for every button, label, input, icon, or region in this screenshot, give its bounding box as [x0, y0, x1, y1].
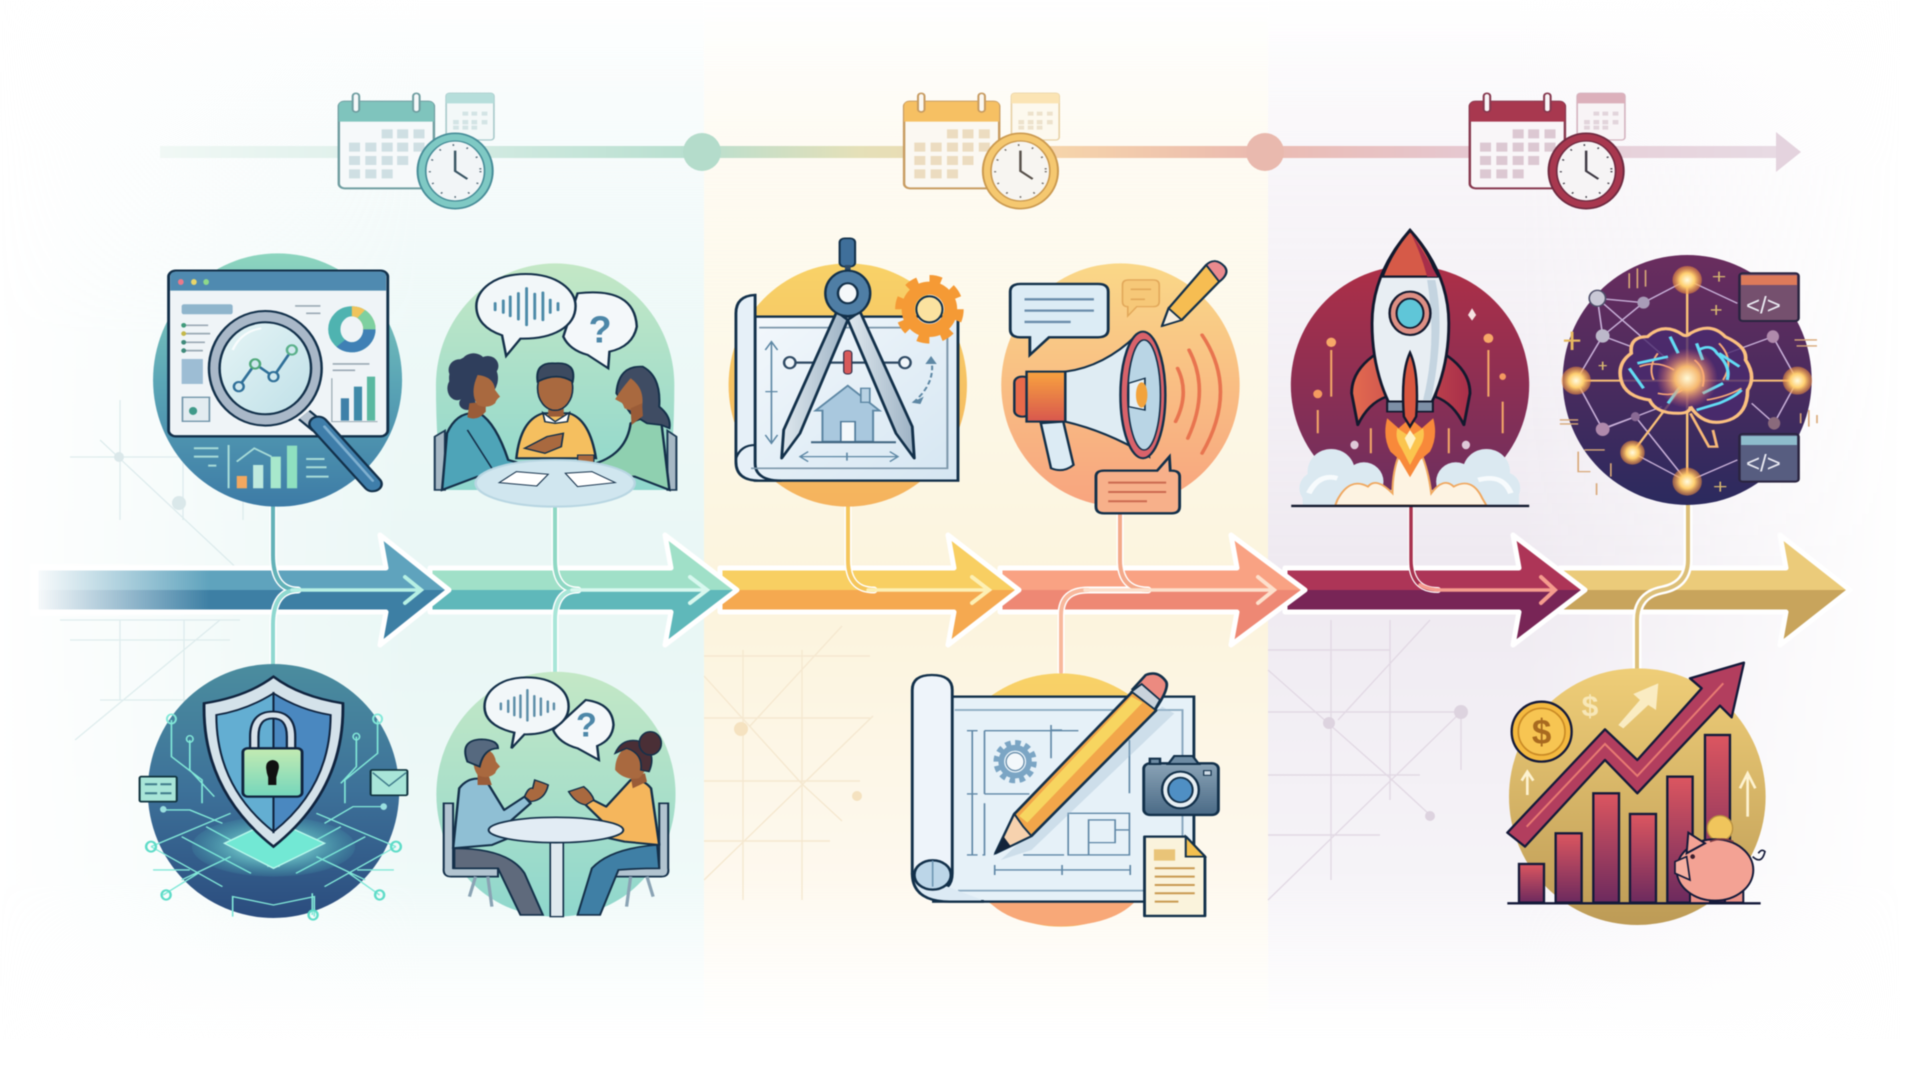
icon: AI brain network: [1560, 255, 1817, 505]
connector: arrow 6: [1637, 505, 1688, 668]
icon: growth chart with coin and piggy bank: $: [1582, 691, 1599, 724]
calendar and clock: amber: [904, 93, 1059, 209]
connectors: arrow 2: [555, 505, 707, 675]
arrow 3: amber: [720, 535, 1019, 645]
arrow 6: gold: [1560, 535, 1850, 645]
icon: growth chart with coin and piggy bank: [1507, 663, 1766, 925]
arrow 4: coral: [1000, 535, 1305, 645]
background network pattern: amber phase: [704, 626, 873, 900]
background panel: amber phase: [704, 0, 1268, 1040]
arrow 5: crimson: [1285, 535, 1585, 645]
connector: arrow 5: [1411, 505, 1555, 603]
timeline line with milestones and arrowhead: [160, 132, 1801, 172]
icon: AI brain network: </>: [1746, 292, 1781, 319]
background network pattern: plum phase: [1268, 620, 1468, 900]
background panel: plum phase: [1268, 0, 1927, 1040]
icon: blueprint and compass: [729, 238, 967, 507]
background network pattern: teal phase: [60, 400, 260, 760]
icon: design blueprint with pencil, camera and document: [912, 673, 1218, 927]
icon: AI brain network: </>: [1746, 451, 1781, 478]
calendar and clock: teal: [339, 93, 494, 209]
calendar and clock: crimson: [1470, 93, 1625, 209]
connector: arrow 3: [848, 505, 989, 603]
icon: team of three in discussion: ?: [589, 309, 612, 351]
icon: two people in conversation: [436, 672, 676, 917]
arrow 1: blue: [30, 535, 449, 645]
icon: security shield and circuit: [140, 664, 407, 920]
icon: megaphone and messages: [1001, 261, 1240, 513]
icon: team of three in discussion: [435, 263, 676, 507]
connectors: arrow 1: [273, 505, 421, 668]
icon: growth chart with coin and piggy bank: $: [1532, 713, 1551, 752]
icon: two people in conversation: ?: [576, 707, 597, 745]
background panel: teal phase: [0, 0, 704, 1040]
icon: rocket launch: [1291, 230, 1529, 506]
icon: dashboard and magnifier: [153, 253, 402, 507]
arrow 2: mint: [430, 535, 737, 645]
connectors: arrow 4: [1061, 510, 1274, 672]
